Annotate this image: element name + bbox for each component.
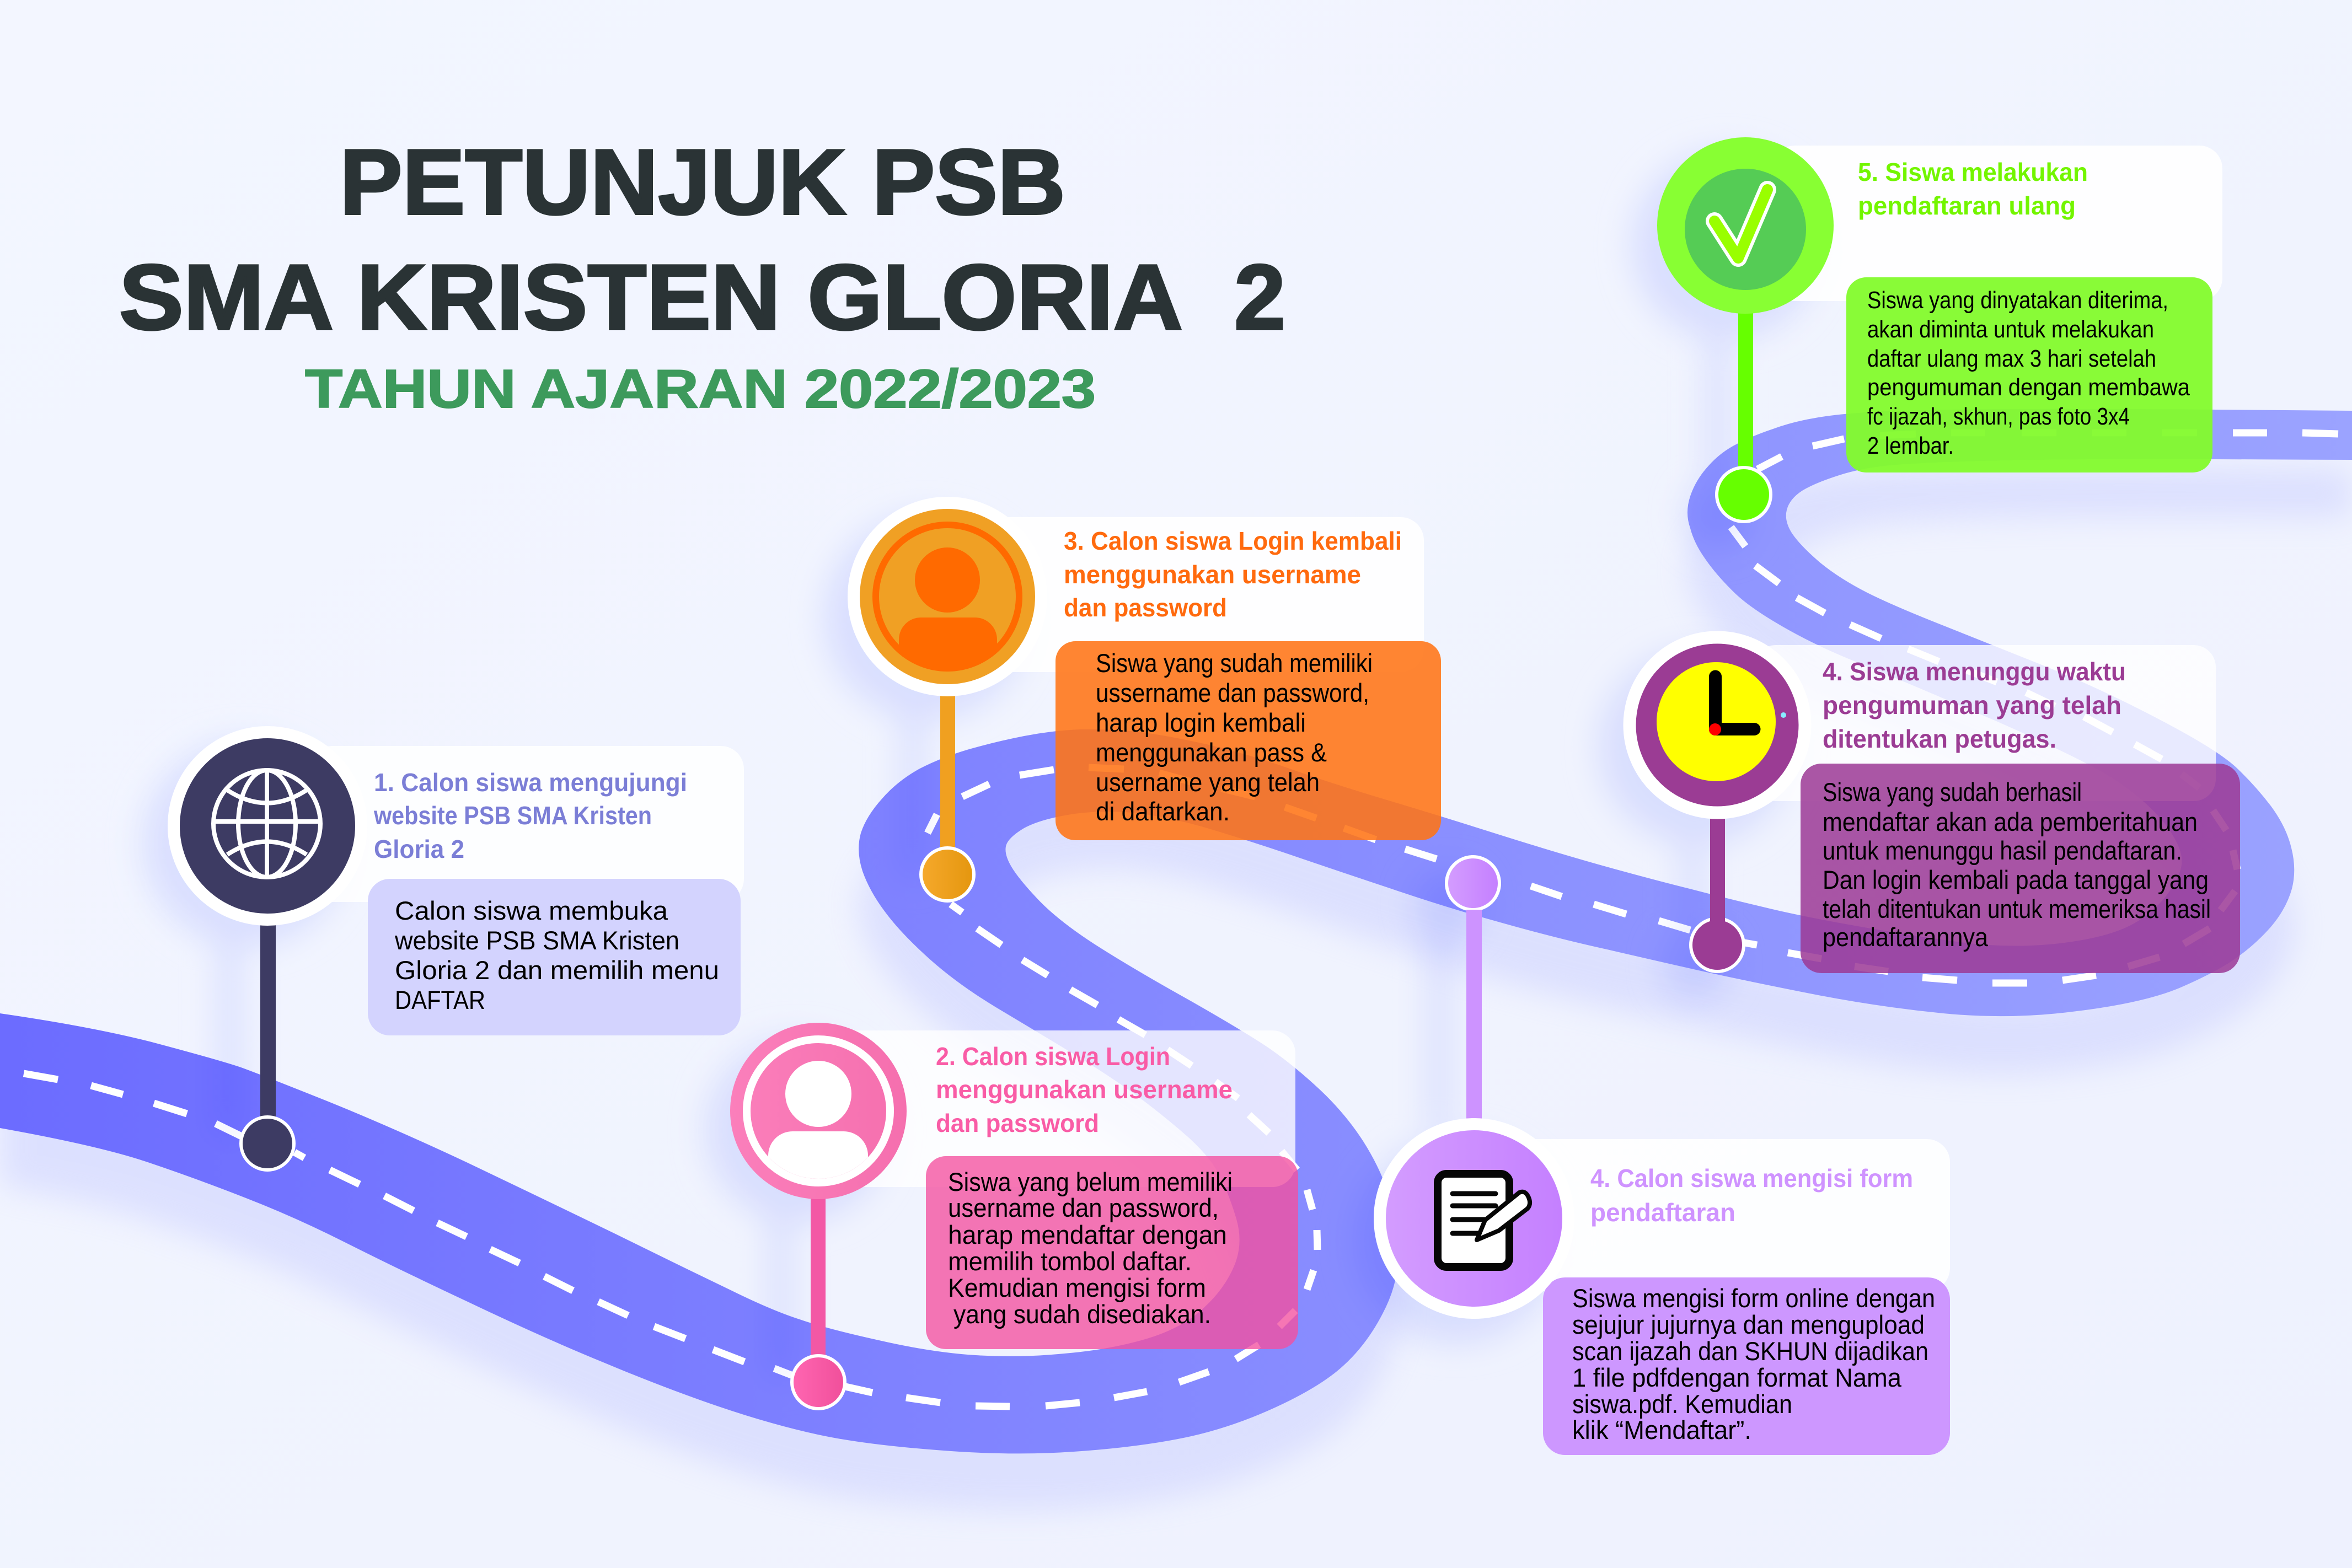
description text: klik “Mendaftar”.	[1572, 1415, 1751, 1445]
pin head	[1657, 137, 1834, 314]
description text: menggunakan pass &	[1096, 738, 1327, 767]
pin foot	[1691, 919, 1744, 971]
description text: DAFTAR	[395, 985, 485, 1014]
heading: ditentukan petugas.	[1823, 724, 2056, 753]
heading: 4. Siswa menunggu waktu	[1823, 657, 2126, 686]
description text: ussername dan password,	[1096, 678, 1369, 707]
description card	[1543, 1277, 1950, 1455]
panel: step 3	[854, 503, 1441, 901]
description text: Siswa yang belum memiliki	[948, 1167, 1233, 1196]
panel: step 4 form	[1380, 857, 1950, 1455]
description text: Calon siswa membuka	[395, 896, 668, 925]
icon: check mark	[1685, 169, 1806, 290]
pin stem	[1738, 307, 1753, 484]
description text: siswa.pdf. Kemudian	[1572, 1389, 1792, 1419]
description text: di daftarkan.	[1096, 797, 1230, 826]
title	[119, 130, 1285, 419]
heading: dan password	[936, 1109, 1099, 1137]
pin head	[174, 732, 361, 920]
road	[0, 409, 2352, 1453]
pin stem	[940, 678, 955, 855]
description text: fc ijazah, skhun, pas foto 3x4	[1867, 403, 2130, 430]
pin shadows	[143, 152, 1820, 1378]
label card	[1772, 146, 2222, 301]
description text: memilih tombol daftar.	[948, 1247, 1192, 1276]
description text: sejujur jujurnya dan mengupload	[1572, 1310, 1925, 1339]
heading: pendaftaran ulang	[1858, 191, 2076, 220]
pin foot	[792, 1356, 845, 1409]
pin stem	[260, 915, 276, 1130]
heading	[1590, 1164, 1913, 1227]
subtitle: TAHUN AJARAN 2022/2023	[305, 358, 1096, 419]
heading: pengumuman yang telah	[1823, 691, 2121, 719]
heading: Gloria 2	[374, 835, 464, 863]
pin foot	[241, 1117, 294, 1170]
panel: step 5	[1657, 137, 2222, 522]
heading: 3. Calon siswa Login kembali	[1064, 527, 1402, 555]
description text	[394, 896, 719, 1014]
description text: 2 lembar.	[1867, 432, 1954, 459]
heading	[1064, 527, 1402, 622]
description text: Siswa yang dinyatakan diterima,	[1867, 287, 2168, 314]
heading: menggunakan username	[1064, 560, 1361, 589]
icon: user	[747, 1039, 890, 1209]
description text	[948, 1167, 1233, 1329]
description text: website PSB SMA Kristen	[394, 926, 679, 955]
heading	[936, 1042, 1233, 1137]
description card	[1846, 277, 2212, 472]
road shadow	[0, 467, 2352, 1511]
description text: harap login kembali	[1096, 708, 1306, 737]
heading: 4. Calon siswa mengisi form	[1590, 1164, 1913, 1193]
pin head	[1630, 637, 1805, 813]
description card	[368, 879, 741, 1035]
description text: pengumuman dengan membawa	[1867, 374, 2190, 401]
pin stem	[1710, 794, 1725, 926]
description card	[926, 1156, 1298, 1349]
pin foot	[1717, 468, 1771, 522]
description text: daftar ulang max 3 hari setelah	[1867, 345, 2156, 372]
description text: pendaftarannya	[1823, 922, 1989, 952]
label card	[827, 1030, 1295, 1187]
title line 1: PETUNJUK PSB	[340, 130, 1065, 234]
label card	[1754, 645, 2216, 801]
heading: 2. Calon siswa Login	[936, 1042, 1170, 1071]
road centre dashes	[24, 433, 2338, 1406]
description text: Kemudian mengisi form	[948, 1273, 1206, 1302]
description text: username dan password,	[948, 1193, 1219, 1222]
heading	[1858, 158, 2088, 220]
heading: pendaftaran	[1590, 1198, 1735, 1227]
pin stem	[1466, 910, 1482, 1130]
panel: step 4 waiting	[1630, 637, 2240, 973]
description text	[1572, 1284, 1935, 1445]
description text: telah ditentukan untuk memeriksa hasil	[1823, 894, 2211, 923]
icon: clock	[1657, 662, 1786, 781]
description text: Siswa yang sudah berhasil	[1823, 777, 2082, 807]
title line 2: 2	[1234, 245, 1285, 349]
label card	[309, 746, 744, 902]
panel: step 1	[174, 732, 744, 1170]
description text	[1823, 777, 2211, 952]
label card	[1489, 1139, 1950, 1291]
description text: untuk menunggu hasil pendaftaran.	[1823, 836, 2182, 865]
label card	[971, 517, 1424, 672]
title line 2: SMA KRISTEN GLORIA	[119, 245, 1183, 349]
description text: harap mendaftar dengan	[948, 1220, 1227, 1249]
icon: form with pencil	[1438, 1174, 1530, 1267]
panel: step 2	[730, 1023, 1298, 1409]
pin foot	[1446, 857, 1499, 910]
description text: username yang telah	[1096, 767, 1320, 797]
description text: 1 file pdfdengan format Nama	[1572, 1363, 1902, 1392]
heading	[373, 768, 687, 863]
description card	[1056, 641, 1441, 840]
description text: scan ijazah dan SKHUN dijadikan	[1572, 1336, 1928, 1366]
description text: Siswa mengisi form online dengan	[1572, 1284, 1935, 1313]
icon: user	[876, 525, 1019, 695]
heading: website PSB SMA Kristen	[373, 801, 652, 830]
pin head	[730, 1023, 907, 1199]
description text: yang sudah disediakan.	[953, 1299, 1211, 1329]
heading: menggunakan username	[936, 1075, 1233, 1104]
description card	[1801, 764, 2240, 973]
pin foot	[921, 848, 974, 901]
description text: Gloria 2 dan memilih menu	[395, 955, 719, 985]
heading: 5. Siswa melakukan	[1858, 158, 2088, 186]
pin head	[854, 503, 1041, 690]
pin head	[1380, 1124, 1568, 1313]
heading: 1. Calon siswa mengujungi	[374, 768, 687, 797]
description text	[1867, 287, 2190, 459]
description text: Dan login kembali pada tanggal yang	[1823, 865, 2209, 894]
description text	[1096, 648, 1373, 826]
pin stem	[811, 1185, 826, 1362]
description text: akan diminta untuk melakukan	[1867, 316, 2154, 343]
heading	[1823, 657, 2126, 753]
description text: mendaftar akan ada pemberitahuan	[1823, 807, 2198, 836]
heading: dan password	[1064, 593, 1227, 622]
description text: Siswa yang sudah memiliki	[1096, 648, 1373, 678]
icon: globe	[213, 770, 320, 877]
